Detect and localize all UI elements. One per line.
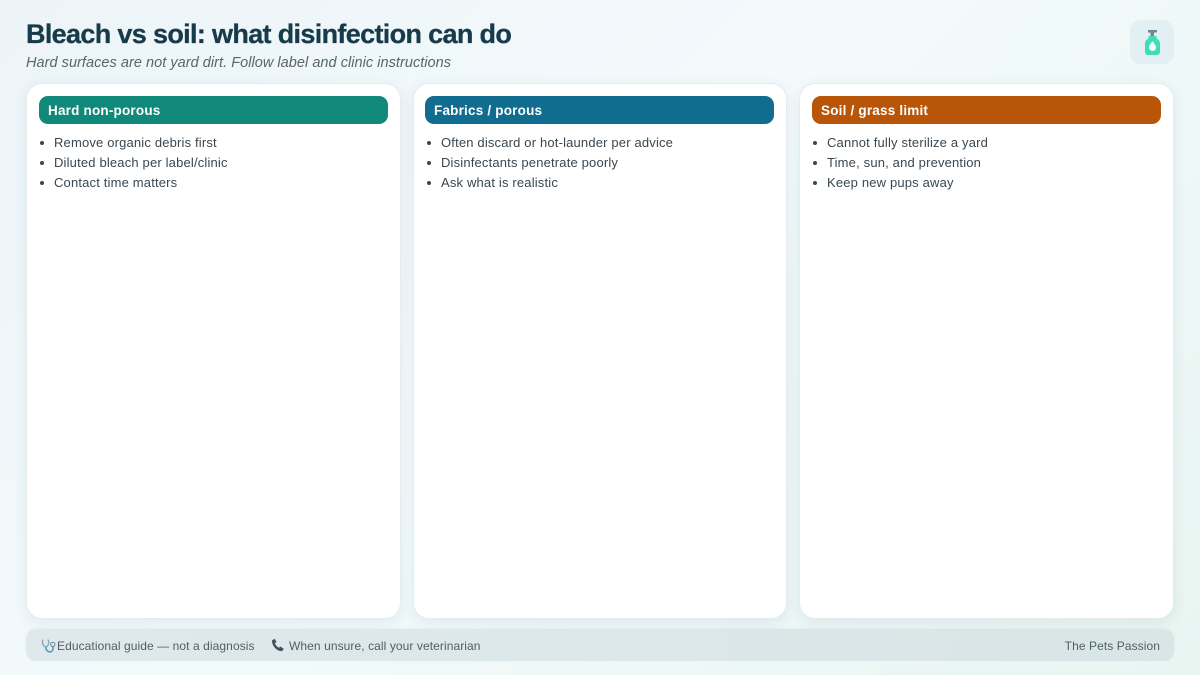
bullet list: soil and grass limit: Keep new pups away	[827, 175, 954, 190]
bullet list: fabrics and porous: Often discard or hot-launder per advice	[441, 135, 673, 150]
heading: hard non-porous	[39, 96, 388, 124]
heading: soil and grass limit	[812, 96, 1161, 124]
icon: stethoscope	[42, 639, 56, 653]
bullet list: fabrics and porous	[427, 135, 673, 190]
heading: hard non-porous: Hard non-porous	[48, 103, 160, 118]
panel: hard non-porous	[26, 83, 401, 619]
bullet list: soil and grass limit	[813, 135, 988, 190]
heading: soil and grass limit: Soil / grass limit	[821, 103, 928, 118]
bullet list: soil and grass limit: Time, sun, and prevention	[827, 155, 981, 170]
footer note: call vet: When unsure, call your veterinarian	[289, 639, 481, 653]
bullet list: hard non-porous: Remove organic debris first	[54, 135, 217, 150]
bullet list: fabrics and porous: Disinfectants penetrate poorly	[441, 155, 618, 170]
bullet list: fabrics and porous: Ask what is realistic	[441, 175, 558, 190]
icon: soap bottle badge	[1130, 20, 1174, 64]
footer note: educational: Educational guide — not a diagnosis	[57, 639, 255, 653]
title: Bleach vs soil: what disinfection can do	[26, 19, 511, 49]
footer bar	[26, 629, 1174, 661]
bullet list: soil and grass limit: Cannot fully sterilize a yard	[827, 135, 988, 150]
icon: telephone	[272, 638, 284, 652]
heading: fabrics and porous	[425, 96, 774, 124]
subtitle: Hard surfaces are not yard dirt. Follow label and clinic instructions	[26, 55, 451, 71]
panel: soil and grass limit	[799, 83, 1174, 619]
bullet list: hard non-porous: Diluted bleach per label/clinic	[54, 155, 228, 170]
panel: fabrics and porous	[413, 83, 787, 619]
heading: fabrics and porous: Fabrics / porous	[434, 103, 542, 118]
footer brand: The Pets Passion	[1065, 639, 1160, 653]
bullet list: hard non-porous: Contact time matters	[54, 175, 177, 190]
bullet list: hard non-porous	[40, 135, 228, 190]
